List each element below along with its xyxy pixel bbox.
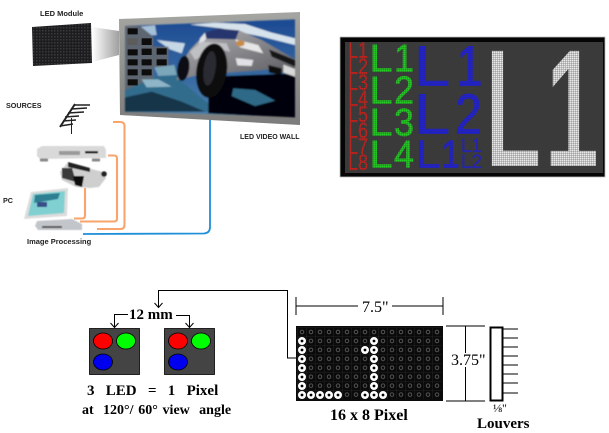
green rows: 2	[394, 70, 414, 112]
icon: DVD player	[37, 146, 106, 162]
label: PC: PC	[3, 196, 13, 205]
connector: orange cables	[74, 122, 124, 229]
icon: antenna	[60, 104, 90, 134]
red rows: L4	[348, 86, 368, 111]
green rows: L	[370, 134, 392, 176]
green rows: L	[370, 70, 392, 112]
connector: blue cable	[83, 120, 210, 234]
blue rows: 2	[455, 82, 482, 146]
dimension: 7.5 inches: 7.5"	[362, 299, 389, 316]
dimension: 7.5 inches	[296, 297, 443, 316]
green rows: L	[370, 38, 392, 80]
label: SOURCES: SOURCES	[6, 101, 42, 110]
red rows	[348, 38, 368, 175]
blue rows: 1	[456, 34, 482, 98]
arrow: left pixel	[110, 314, 128, 328]
red rows: L1	[348, 38, 368, 63]
LED video wall screen	[119, 12, 300, 125]
red rows: L7	[348, 134, 368, 159]
label: Image Processing: Image Processing	[27, 237, 92, 246]
blue rows: L2	[461, 152, 482, 173]
LED board: 16 x 8	[296, 326, 443, 401]
red rows: L2	[348, 54, 368, 79]
blue rows: L	[414, 34, 450, 98]
green rows: 4	[394, 134, 414, 176]
blue rows: L	[414, 82, 450, 146]
green rows: 3	[394, 102, 414, 144]
green rows: 1	[394, 38, 414, 80]
blue rows: 1	[442, 134, 460, 176]
icon: computer	[24, 188, 82, 230]
blue rows: L1	[461, 136, 482, 157]
caption: 3 LED = 1 Pixel: 3 LED = 1 Pixel	[87, 383, 218, 399]
arrow: into 12 mm	[154, 303, 162, 308]
green rows: L	[370, 102, 392, 144]
label: one-eighth inch: ⅛"	[493, 401, 507, 415]
red rows: L3	[348, 70, 368, 95]
bracket line from pixels to module	[158, 290, 296, 358]
label: 12 mm: 12 mm	[129, 307, 173, 323]
lit pixels	[299, 338, 386, 398]
panel: LED message display	[340, 16, 605, 200]
caption: 16 x 8 Pixel: 16 x 8 Pixel	[330, 407, 408, 424]
arrow: right pixel	[176, 316, 194, 328]
label: LED VIDEO WALL: LED VIDEO WALL	[240, 134, 300, 141]
dimension: 3.75 inches: 3.75"	[451, 352, 486, 369]
heading: LED Module: LED Module	[40, 9, 83, 18]
blue rows: L	[416, 134, 440, 176]
white large L1: L	[484, 16, 540, 200]
label: Louvers: Louvers	[477, 416, 530, 432]
icon: video camera	[60, 162, 107, 188]
projection beam	[92, 27, 119, 62]
red rows: L8	[348, 150, 368, 175]
green rows	[370, 38, 414, 176]
red rows: L5	[348, 102, 368, 127]
louver diagram	[490, 328, 518, 400]
caption: view angle: at 120°/ 60° view angle	[82, 403, 231, 418]
pixel box: left	[90, 328, 140, 374]
icon: LED module	[32, 23, 92, 66]
blue rows	[414, 34, 482, 176]
module grid squares	[128, 28, 167, 85]
pixel box: right	[164, 328, 214, 374]
red rows: L6	[348, 118, 368, 143]
dimension: 3.75 inches	[446, 326, 486, 401]
